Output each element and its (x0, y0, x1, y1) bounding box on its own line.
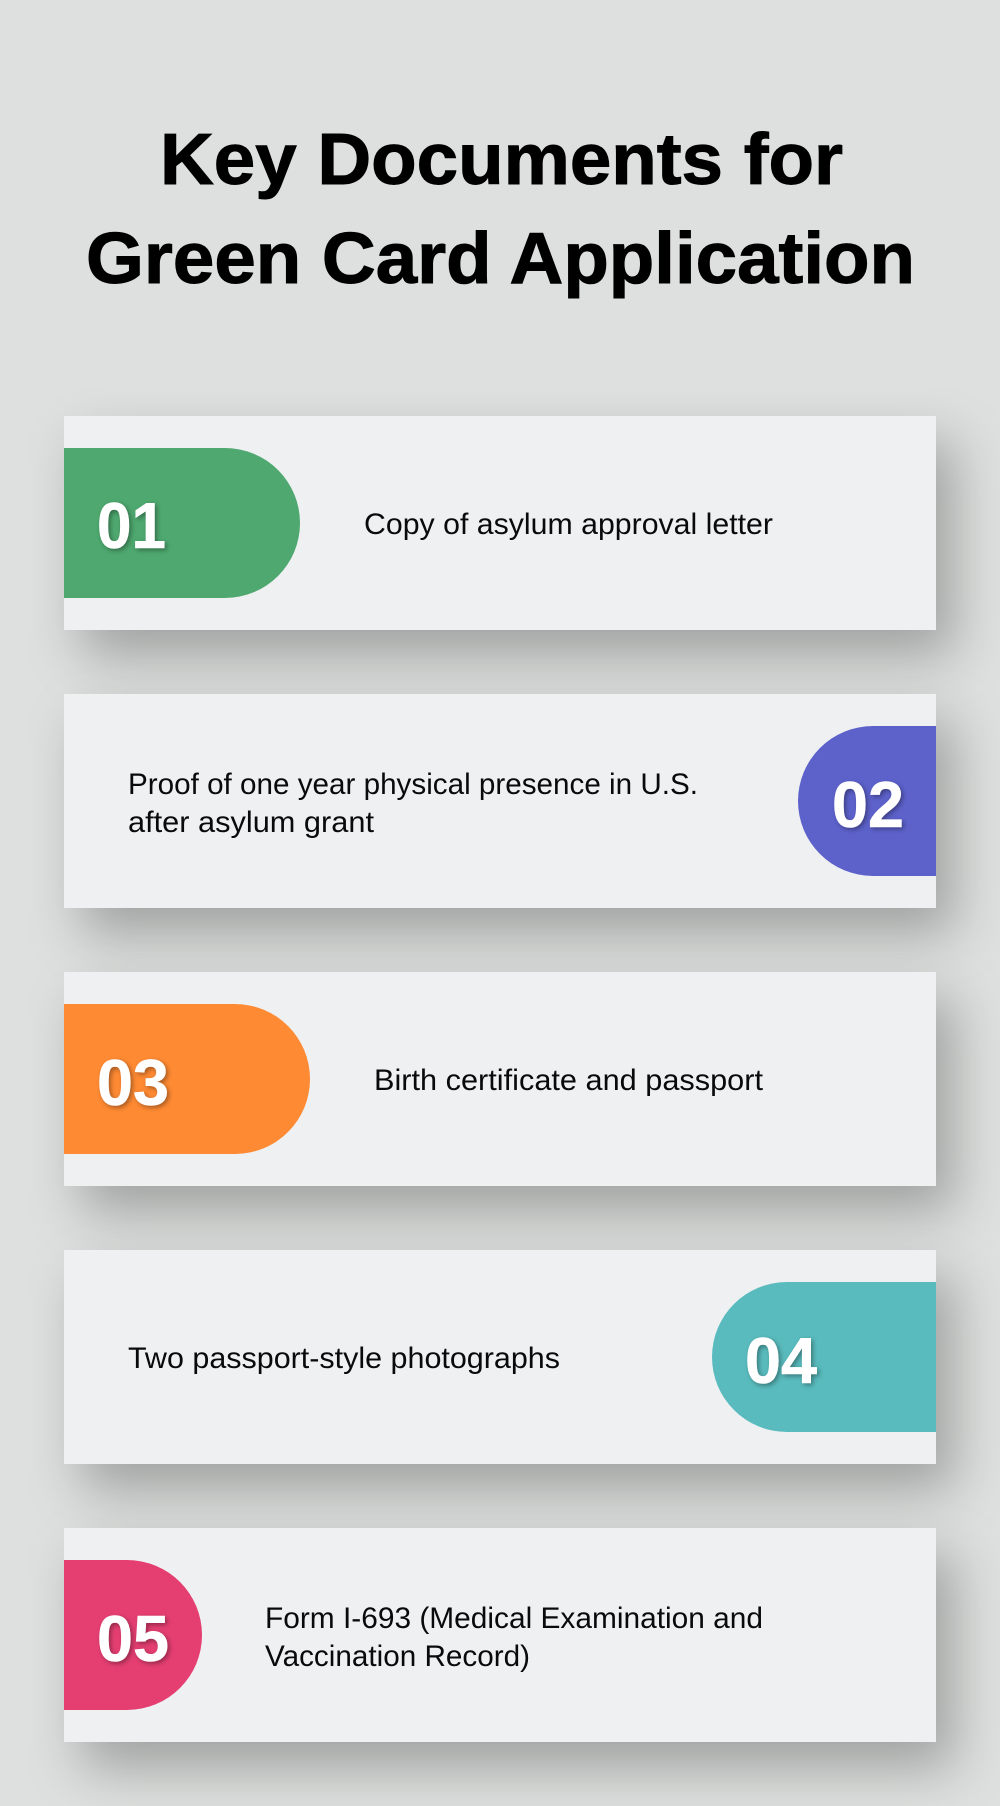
number pill 04: 04 (745, 1324, 817, 1397)
text: item 05: Form I-693 (Medical Examination and (265, 1602, 763, 1635)
panel: item 02 (64, 694, 936, 908)
text: item 01: Copy of asylum approval letter (364, 508, 773, 541)
title: Green Card Application (86, 219, 915, 299)
panel: item 05 (64, 1528, 936, 1742)
title (86, 120, 915, 299)
number pill 05: 05 (97, 1602, 169, 1675)
text: item 02: Proof of one year physical presence in U.S. (128, 768, 698, 801)
number pill 02: 02 (832, 768, 904, 841)
number pill 05 (64, 1560, 202, 1710)
number pill 01 (64, 448, 300, 598)
panel: item 04 (64, 1250, 936, 1464)
number pill 03: 03 (97, 1046, 169, 1119)
title: Key Documents for (160, 120, 843, 200)
text: item 05 (265, 1602, 763, 1673)
text: item 02 (128, 768, 698, 839)
number pill 02 (798, 726, 936, 876)
text: item 04: Two passport-style photographs (128, 1342, 560, 1375)
number pill 03 (64, 1004, 310, 1154)
text: item 03: Birth certificate and passport (374, 1064, 764, 1097)
panel: item 01 (64, 416, 936, 630)
number pill 04 (712, 1282, 936, 1432)
panel: item 03 (64, 972, 936, 1186)
text: item 05: Vaccination Record) (265, 1640, 530, 1673)
text: item 02: after asylum grant (128, 806, 375, 839)
number pill 01: 01 (97, 489, 166, 562)
